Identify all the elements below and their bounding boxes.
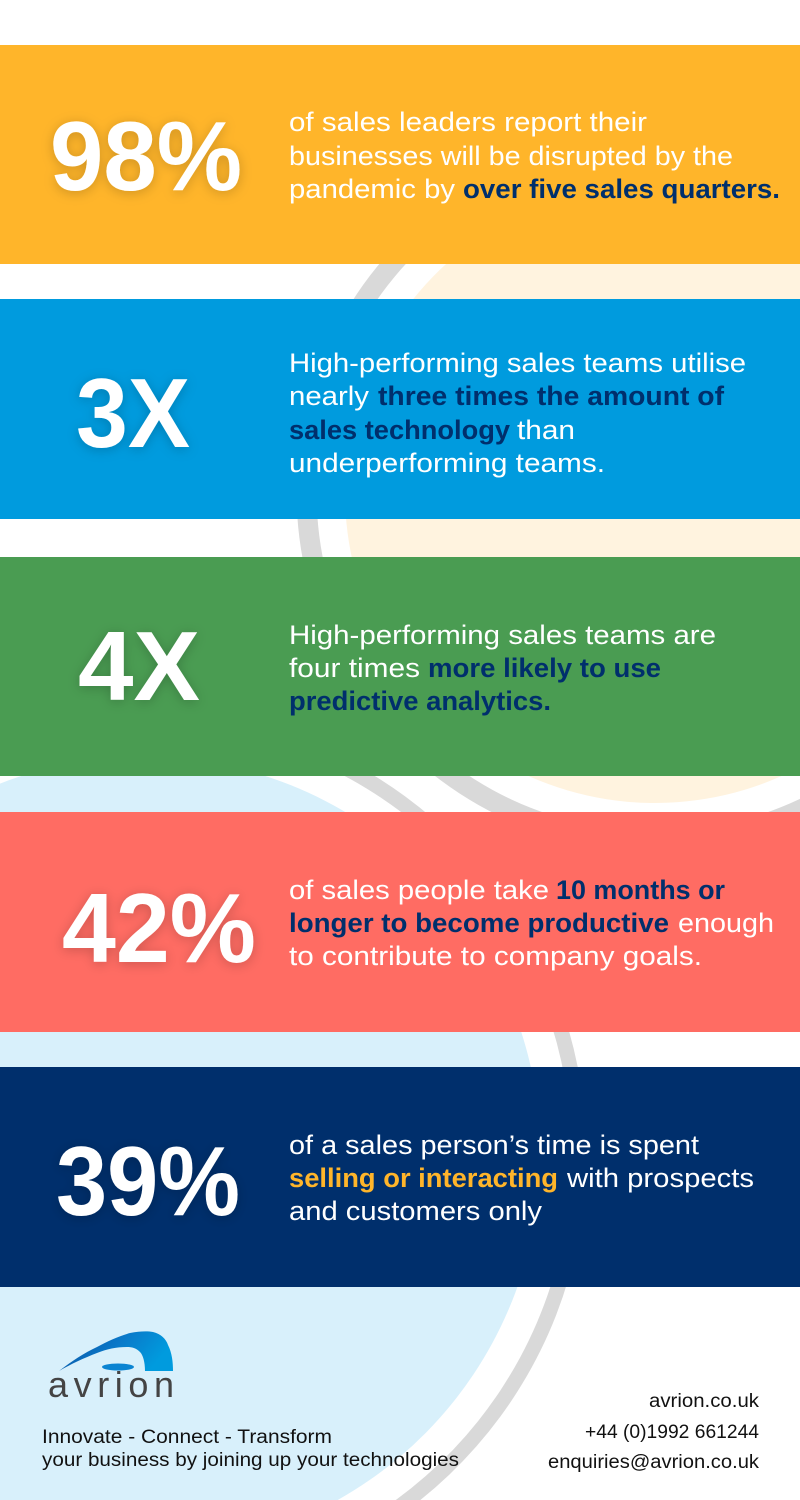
text: 4X description xyxy=(289,620,716,716)
text: 42% description: to contribute to company goals. xyxy=(289,941,702,971)
contact details: enquiries@avrion.co.uk xyxy=(548,1452,760,1473)
icon: logo ellipse xyxy=(102,1364,134,1370)
contact details: avrion.co.uk xyxy=(649,1391,760,1412)
text: 4X description: four times xyxy=(289,653,420,683)
background circle: light blue xyxy=(0,757,540,1500)
text: 39% description: of a sales person’s time is spent xyxy=(289,1130,700,1160)
tagline: your business by joining up your technologies xyxy=(42,1450,459,1471)
text: 98% description xyxy=(289,107,780,204)
background circle: cream xyxy=(345,183,800,803)
tagline xyxy=(42,1427,459,1471)
text: 98% description: businesses will be disrupted by the xyxy=(289,141,733,171)
text: 39% description: selling or interacting xyxy=(289,1163,558,1193)
panel: 98% disrupted xyxy=(0,45,800,264)
text: 3X description: nearly xyxy=(289,381,370,411)
panel: 3X technology xyxy=(0,299,800,519)
text: 3X description: three times the amount of xyxy=(378,381,725,411)
text: 42% description: 10 months or xyxy=(556,875,725,905)
text: 39% description: and customers only xyxy=(289,1196,543,1226)
logo wordmark: avrion xyxy=(48,1364,174,1405)
text: 4X description: High-performing sales teams are xyxy=(289,620,716,650)
icon: logo swoosh xyxy=(59,1331,173,1371)
text: 39% description: with prospects xyxy=(566,1163,754,1193)
text: 42% description xyxy=(289,875,774,971)
text: 42% description: of sales people take xyxy=(289,875,549,905)
text: 98% description: of sales leaders report their xyxy=(289,107,647,137)
stat: 42%: 42% xyxy=(62,873,256,983)
background ring: lower grey arc xyxy=(0,711,586,1500)
text: 98% description: pandemic by xyxy=(289,174,456,204)
text: 98% description: over five sales quarters. xyxy=(463,174,780,204)
text: 3X description: than xyxy=(517,415,575,445)
text: 42% description: enough xyxy=(678,908,774,938)
contact details xyxy=(548,1391,760,1473)
text: 4X description: more likely to use xyxy=(428,653,661,683)
tagline: Innovate - Connect - Transform xyxy=(42,1427,332,1448)
stat: 4X: 4X xyxy=(78,611,200,721)
text: 42% description: longer to become productive xyxy=(289,908,669,938)
text: 3X description xyxy=(289,348,746,478)
text: 39% description xyxy=(289,1130,754,1226)
stat: 98%: 98% xyxy=(50,101,242,211)
panel: 4X predictive analytics xyxy=(0,557,800,776)
text: 3X description: sales technology xyxy=(289,415,510,445)
text: 4X description: predictive analytics. xyxy=(289,686,551,716)
text: 3X description: underperforming teams. xyxy=(289,448,605,478)
background ring: upper grey arc xyxy=(297,134,800,852)
panel: 42% ramp-up time xyxy=(0,812,800,1032)
stat: 39%: 39% xyxy=(56,1126,240,1236)
stat: 3X: 3X xyxy=(76,358,190,468)
text: 3X description: High-performing sales teams utilise xyxy=(289,348,746,378)
logo: avrion xyxy=(48,1331,174,1405)
panel: 39% selling time xyxy=(0,1067,800,1287)
contact details: +44 (0)1992 661244 xyxy=(585,1422,759,1443)
